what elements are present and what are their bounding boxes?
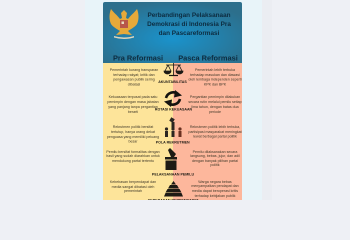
- text: pemilu pra: Pemilu bersifat formalitas dengan: [106, 150, 160, 154]
- heading: Pasca Reformasi: Pasca Reformasi: [178, 54, 238, 62]
- text: pemilu pra: hasil yang sudah diarahkan untuk: [106, 154, 160, 158]
- text: media pasca: media dapat beroperasi kritis: [192, 189, 238, 193]
- text: pemilu pasca: Pemilu dilaksanakan secara: [193, 150, 237, 154]
- heading: Pra Reformasi: Pra Reformasi: [113, 54, 163, 62]
- panel: Pasca Reformasi column: [173, 63, 242, 200]
- title: dan Pascareformasi: [159, 30, 220, 37]
- text: rekrutmen pasca: Rekrutmen politik lebih terbuka,: [190, 125, 240, 129]
- text: pemilu pasca: politik: [210, 163, 220, 167]
- panel: Pra Reformasi column: [103, 63, 173, 200]
- text: media pasca: menyampaikan pendapat dan: [191, 184, 239, 188]
- icon: rotation arrows: [164, 90, 182, 107]
- text: akuntabilitas pra: terhadap rakyat; kritik dan: [113, 73, 155, 77]
- label: pelaksanaan pemilu: PELAKSANAAN PEMILU: [152, 172, 194, 176]
- text: rotasi pasca: lima tahun, dengan batas dua: [191, 105, 239, 109]
- text: rekrutmen pra: penguasa yang memiliki peluang: [107, 135, 159, 139]
- text: media pasca: Warga negara bebas: [198, 180, 232, 184]
- text: rotasi pasca: periode: [209, 110, 221, 114]
- text: rotasi pra: berarti: [128, 110, 138, 114]
- text: pemilu pasca: langsung, bebas, jujur, dan adil: [190, 154, 240, 158]
- text: media pra: pemerintah: [124, 189, 142, 193]
- text: pemilu pra: mendukung partai tertentu: [112, 159, 154, 163]
- icon: recruitment people: [165, 117, 182, 137]
- text: pemilu pasca: dengan banyak pilihan partai: [192, 159, 238, 163]
- icon: garuda emblem: [110, 9, 138, 39]
- label: akuntabilitas: AKUNTABILITAS: [158, 80, 187, 84]
- text: rekrutmen pra: tertutup, hanya orang dekat: [111, 130, 155, 134]
- text: rotasi pra: Kekuasaan terpusat pada satu: [109, 95, 157, 99]
- panel: header: [103, 2, 242, 63]
- text: rotasi pasca: secara rutin melalui pemilu setiap: [188, 100, 242, 104]
- text: rotasi pra: yang panjang tanpa pergantian: [108, 105, 158, 109]
- text: rotasi pra: pemimpin dengan masa jabatan: [107, 100, 159, 104]
- text: akuntabilitas pasca: terhadap masukan dan diawasi: [190, 73, 240, 77]
- icon: pile of people: [164, 181, 183, 196]
- text: media pasca: terhadap kebijakan publik: [195, 194, 236, 198]
- text: akuntabilitas pasca: oleh lembaga independen seperti: [188, 78, 242, 82]
- text: akuntabilitas pra: pengawasan publik sering: [113, 78, 155, 82]
- label: pola rekrutmen: POLA REKRUTMEN: [156, 140, 190, 144]
- text: akuntabilitas pasca: Pemerintah lebih terbuka: [195, 68, 235, 72]
- text: akuntabilitas pasca: KPK dan BPK: [204, 82, 227, 86]
- text: rotasi pasca: Pergantian pemimpin dilakukan: [190, 95, 240, 99]
- text: media pra: media sangat dibatasi oleh: [112, 185, 154, 189]
- text: akuntabilitas pra: Pemerintah kurang transparan: [110, 68, 158, 72]
- text: rekrutmen pra: besar: [128, 140, 138, 144]
- text: rekrutmen pasca: lewat berbagai partai politik: [193, 134, 237, 138]
- text: rekrutmen pasca: partisipasi masyarakat meningkat: [188, 130, 242, 134]
- text: rekrutmen pra: Rekrutmen politik bersifat: [113, 125, 153, 129]
- title: Perbandingan Pelaksanaan: [147, 12, 231, 19]
- panel: infographic: [103, 2, 242, 202]
- title: Demokrasi di Indonesia Pra: [147, 21, 231, 28]
- icon: scales: [164, 63, 183, 76]
- label: rotasi kekuasaan: ROTASI KEKUASAAN: [155, 108, 193, 112]
- text: media pra: Kebebasan berpendapat dan: [110, 180, 156, 184]
- icon: ballot box: [165, 148, 177, 170]
- text: akuntabilitas pra: dibatasi: [128, 82, 140, 86]
